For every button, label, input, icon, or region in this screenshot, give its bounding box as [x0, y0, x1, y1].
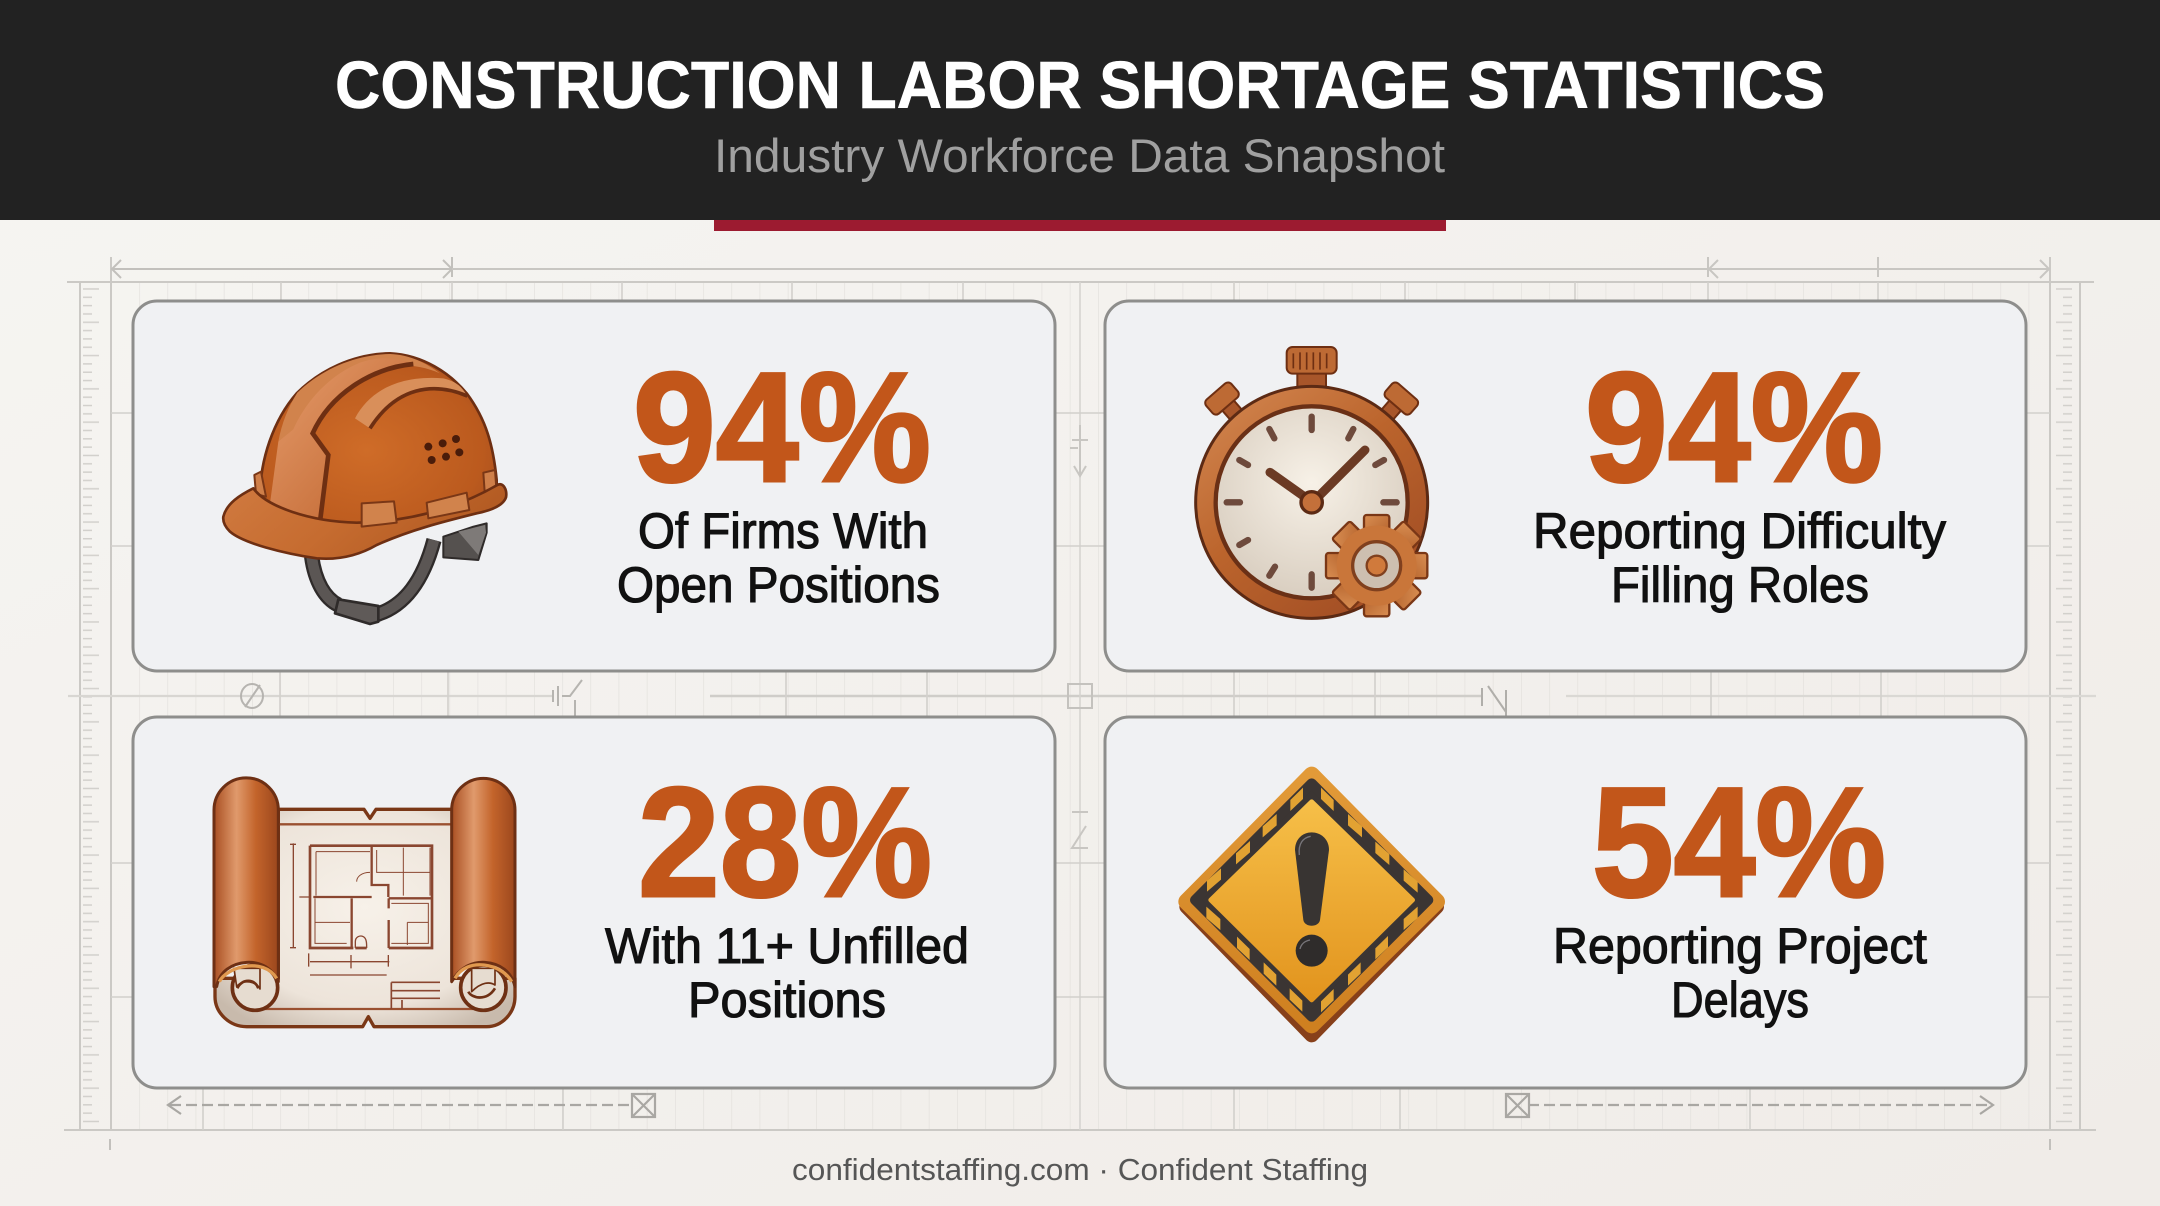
- drafting symbol: break right: [1482, 686, 1506, 720]
- dashed arrow: bottom right: [1506, 1094, 1993, 1117]
- stat: 94%: 94%: [633, 341, 931, 515]
- drafting symbol: lower center: [1072, 812, 1088, 848]
- label: reporting project delays: Reporting Project: [1553, 918, 1927, 974]
- blueprint grid: [64, 257, 2096, 1130]
- drafting symbol: upper center: [1070, 425, 1088, 476]
- label: reporting difficulty filling roles: Reporting Difficulty: [1533, 503, 1946, 559]
- label: of firms with open positions: Open Positions: [617, 557, 940, 613]
- label: with 11+ unfilled positions: With 11+ Unfilled: [605, 918, 969, 974]
- panel: project delays: [1105, 717, 2026, 1088]
- icon: stopwatch with gear: [1196, 347, 1428, 618]
- stat: 28%: 28%: [638, 756, 932, 930]
- label: of firms with open positions: [617, 503, 940, 613]
- title: CONSTRUCTION LABOR SHORTAGE STATISTICS: [335, 48, 1825, 123]
- drafting symbol: center box: [1068, 684, 1092, 708]
- icon: hard hat: [223, 353, 506, 624]
- icon: blueprint scroll: [214, 778, 515, 1027]
- red accent bar: [714, 220, 1446, 231]
- label: reporting project delays: Delays: [1671, 972, 1809, 1028]
- dashed arrow: bottom left: [168, 1094, 655, 1117]
- subtitle: Industry Workforce Data Snapshot: [714, 129, 1445, 182]
- panel: firms with open positions: [133, 301, 1055, 671]
- label: reporting difficulty filling roles: Filling Roles: [1611, 557, 1869, 613]
- header band: [0, 0, 2160, 220]
- stat: 54%: 54%: [1592, 756, 1886, 930]
- footer source text: confidentstaffing.com · Confident Staffing: [792, 1152, 1368, 1187]
- label: reporting difficulty filling roles: [1533, 503, 1946, 613]
- small crop tick bottom left: [110, 1139, 2050, 1150]
- drafting symbol: circle slash: [241, 684, 263, 708]
- panel: difficulty filling roles: [1105, 301, 2026, 671]
- label: of firms with open positions: Of Firms With: [638, 503, 928, 559]
- label: with 11+ unfilled positions: Positions: [688, 972, 886, 1028]
- stat: 94%: 94%: [1585, 341, 1883, 515]
- label: reporting project delays: [1553, 918, 1927, 1028]
- dimension line: top left: [111, 257, 452, 278]
- dimension line: top right: [452, 257, 2050, 278]
- panel: 11+ unfilled positions: [133, 717, 1055, 1088]
- drafting symbol: break left: [553, 680, 582, 718]
- icon: warning sign: [1187, 775, 1437, 1035]
- label: with 11+ unfilled positions: [605, 918, 969, 1028]
